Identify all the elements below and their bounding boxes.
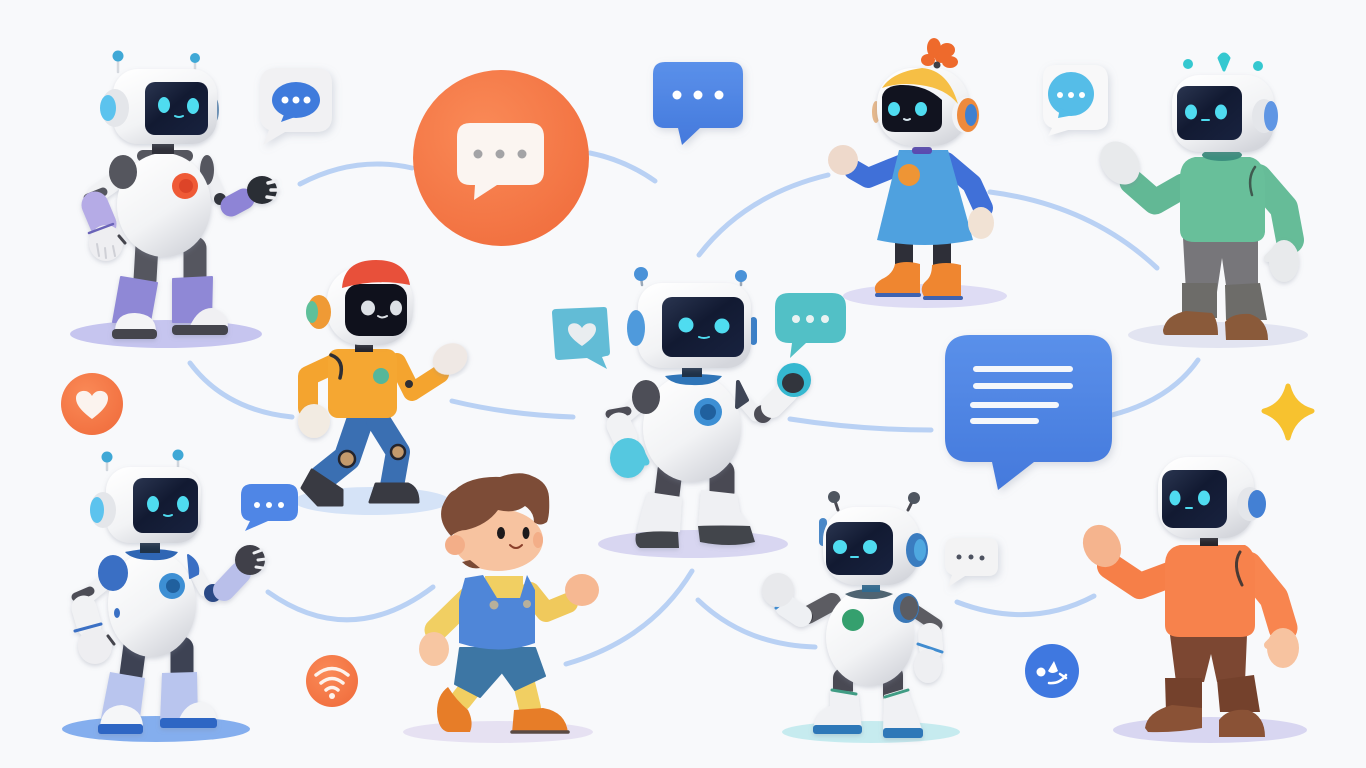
robot: bottom left (62, 450, 266, 742)
speech bubble: white with teal chat (1043, 65, 1108, 136)
icon: large orange chat circle (413, 70, 589, 246)
speech bubble: teal chat (775, 293, 846, 358)
speech bubble: large blue message (945, 335, 1112, 490)
robot: green sweater (1092, 54, 1308, 348)
robot: bottom center right (762, 491, 960, 743)
icon: blue face circle (1025, 644, 1079, 698)
robot: center (598, 267, 811, 558)
robot: orange sweater (1075, 457, 1307, 743)
robot: girl with yellow hat (828, 38, 1007, 308)
icon: gold star (1264, 386, 1312, 438)
speech bubble: blue small (241, 484, 298, 531)
speech bubble: white with blue chat (260, 68, 332, 145)
icon: wifi circle (306, 655, 358, 707)
speech bubble: teal heart (552, 307, 610, 369)
speech bubble: white small (945, 538, 998, 587)
character: boy with overalls (403, 473, 599, 743)
robot: red cap, orange jumper (294, 260, 473, 515)
connector arcs (190, 153, 1198, 664)
robot: top left (70, 50, 278, 348)
icon: heart circle (61, 373, 123, 435)
speech bubble: blue top center (653, 62, 743, 145)
